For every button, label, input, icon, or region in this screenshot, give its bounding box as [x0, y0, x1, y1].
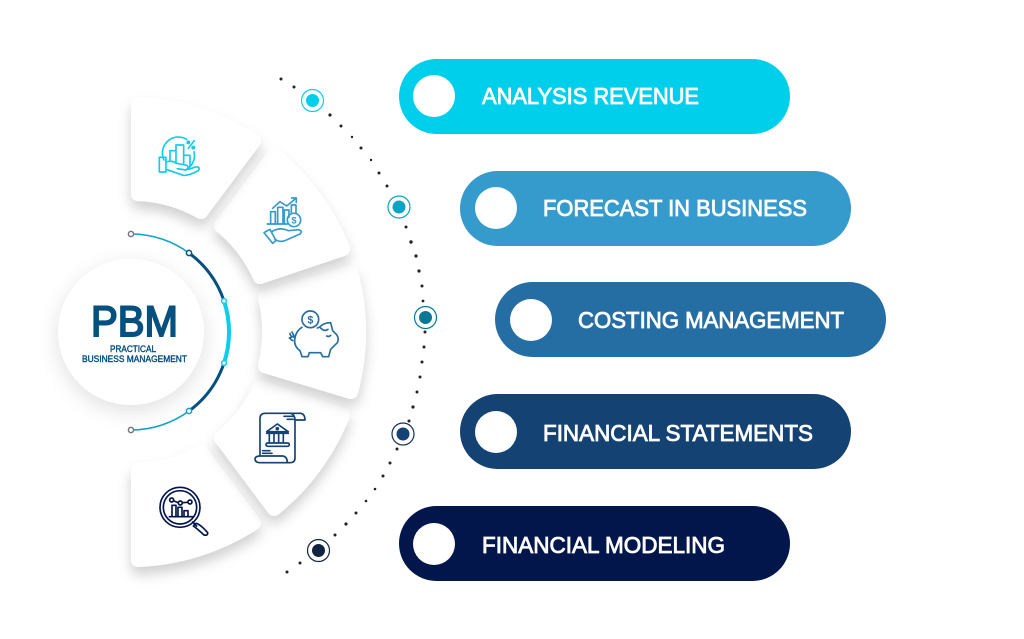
PBM heading: PBM — [91, 298, 178, 346]
pill: financial modeling — [399, 506, 790, 581]
pill: costing management — [495, 282, 886, 357]
label: costing management: COSTING MANAGEMENT — [578, 307, 844, 333]
icon: piggy bank — [289, 311, 338, 357]
icon: chart on hand with percent — [159, 137, 199, 175]
label: analysis revenue: ANALYSIS REVENUE — [482, 83, 699, 109]
subtitle line 1: PRACTICAL — [110, 344, 156, 354]
segment 1 — [138, 104, 254, 212]
dotted arc — [280, 78, 426, 574]
fan of five segments — [138, 104, 359, 560]
segment 5 — [138, 452, 254, 560]
segment 4 — [221, 387, 343, 509]
icon: bank document scroll — [255, 413, 305, 463]
segment 2 — [221, 155, 343, 277]
pill: financial statements — [460, 394, 851, 469]
icon: growth chart with coin on hand: $ — [291, 215, 297, 225]
icon: growth chart with coin on hand — [264, 198, 301, 243]
segmented arc around centre — [128, 231, 229, 433]
pill: analysis revenue — [399, 59, 790, 134]
subtitle line 2: BUSINESS MANAGEMENT — [82, 354, 188, 364]
ring marker 3 — [414, 306, 436, 328]
icon: magnifier over chart — [160, 487, 208, 535]
ring marker 1 — [302, 90, 324, 112]
label: financial modeling: FINANCIAL MODELING — [482, 532, 725, 558]
ring marker 5 — [308, 540, 330, 562]
icon: piggy bank: $ — [307, 314, 313, 326]
ring marker 4 — [392, 423, 414, 445]
label: forecast in business: FORECAST IN BUSINESS — [543, 195, 807, 221]
label: financial statements: FINANCIAL STATEMENTS — [543, 420, 813, 446]
pill: forecast in business — [460, 171, 851, 246]
segment 3 — [265, 272, 359, 392]
ring marker 2 — [388, 196, 410, 218]
centre circle — [58, 259, 204, 405]
